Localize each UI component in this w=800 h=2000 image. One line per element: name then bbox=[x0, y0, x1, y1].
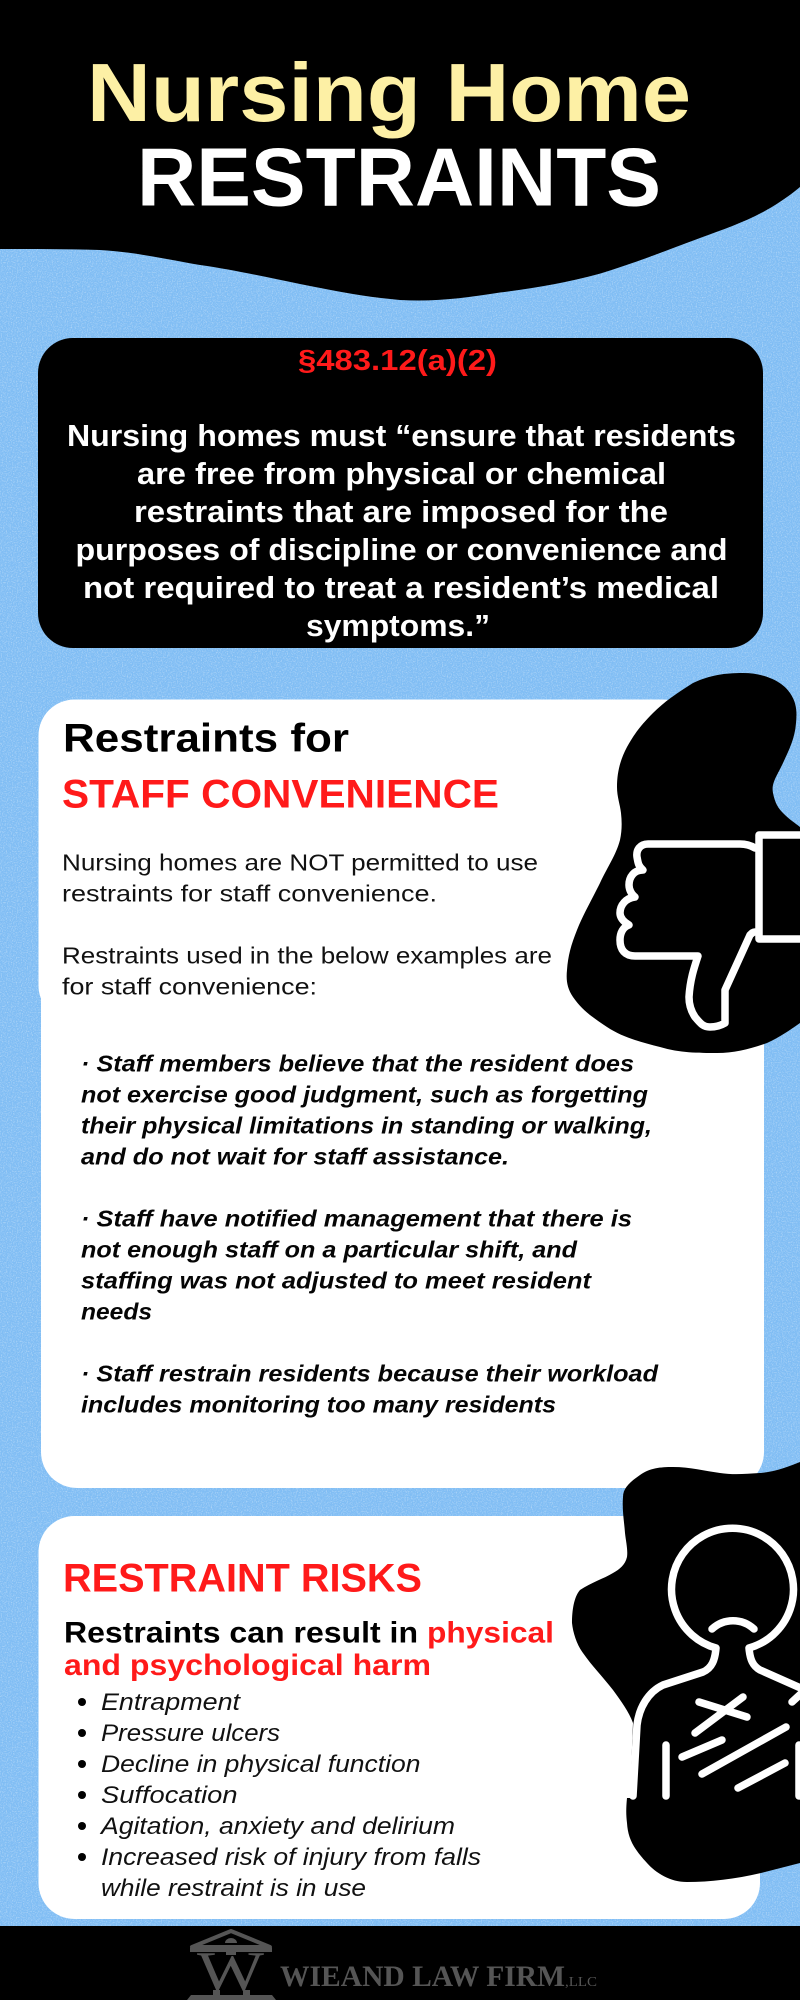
intro text: for staff convenience: bbox=[62, 973, 317, 999]
regulation citation: §483.12(a)(2) bbox=[298, 345, 497, 377]
intro text: Nursing homes are NOT permitted to use bbox=[62, 850, 538, 876]
examples list: their physical limitations in standing or walking, bbox=[81, 1113, 652, 1139]
header banner bbox=[0, 0, 800, 301]
icon: injured body on black blob bbox=[572, 1462, 800, 1882]
quote text: Nursing homes must “ensure that residents bbox=[67, 419, 736, 453]
logo: law firm building bbox=[187, 1931, 276, 2000]
risks list: Decline in physical function bbox=[101, 1751, 420, 1778]
quote text: are free from physical or chemical bbox=[137, 457, 666, 491]
quote text: symptoms.” bbox=[306, 609, 490, 643]
heading: restraints for staff convenience: Restraints for bbox=[63, 716, 349, 760]
quote text: purposes of discipline or convenience and bbox=[76, 533, 728, 567]
risks list: Entrapment bbox=[101, 1689, 241, 1716]
examples list: needs bbox=[81, 1299, 152, 1325]
risks list: Pressure ulcers bbox=[101, 1720, 280, 1747]
heading: restraint risks: RESTRAINT RISKS bbox=[63, 1557, 422, 1601]
quote text: restraints that are imposed for the bbox=[134, 495, 668, 529]
examples list: · Staff restrain residents because their workload bbox=[81, 1361, 659, 1387]
heading: restraints for staff convenience: STAFF CONVENIENCE bbox=[62, 773, 499, 817]
subheading: physical and psychological harm: and psychological harm bbox=[64, 1649, 431, 1682]
risks list bbox=[78, 1689, 481, 1902]
firm name: WIEAND LAW FIRM bbox=[280, 1960, 565, 1993]
risks list: Suffocation bbox=[101, 1782, 238, 1809]
title bbox=[87, 46, 691, 223]
title: Nursing Home bbox=[87, 46, 691, 139]
quote text: not required to treat a resident’s medical bbox=[83, 571, 719, 605]
examples list: not enough staff on a particular shift, and bbox=[81, 1237, 578, 1263]
intro text: restraints for staff convenience. bbox=[62, 881, 437, 907]
intro text bbox=[62, 850, 552, 999]
risks list: Agitation, anxiety and delirium bbox=[99, 1813, 455, 1840]
footer bar bbox=[0, 1926, 800, 2000]
examples list: staffing was not adjusted to meet resident bbox=[81, 1268, 592, 1294]
firm name: ,LLC bbox=[565, 1975, 597, 1990]
examples list: and do not wait for staff assistance. bbox=[81, 1144, 509, 1170]
panel: regulation quote bbox=[38, 338, 763, 648]
subheading: physical and psychological harm: Restraints can result in bbox=[64, 1617, 418, 1650]
examples list bbox=[81, 1051, 659, 1418]
panel: staff convenience bbox=[38, 673, 800, 1488]
heading: restraints for staff convenience bbox=[62, 716, 499, 817]
examples list: not exercise good judgment, such as forgetting bbox=[81, 1082, 648, 1108]
examples list: · Staff members believe that the resident does bbox=[81, 1051, 634, 1077]
icon: thumbs down on black blob bbox=[567, 673, 800, 1053]
subheading: physical and psychological harm: physical bbox=[427, 1617, 554, 1650]
subheading: physical and psychological harm bbox=[64, 1617, 554, 1682]
risks list: while restraint is in use bbox=[101, 1875, 366, 1902]
examples list: · Staff have notified management that there is bbox=[81, 1206, 632, 1232]
panel: restraint risks bbox=[38, 1462, 800, 1919]
examples list: includes monitoring too many residents bbox=[81, 1392, 556, 1418]
title: RESTRAINTS bbox=[137, 130, 661, 223]
intro text: Restraints used in the below examples are bbox=[62, 943, 552, 969]
quote text bbox=[67, 419, 736, 643]
risks list: Increased risk of injury from falls bbox=[101, 1844, 481, 1871]
